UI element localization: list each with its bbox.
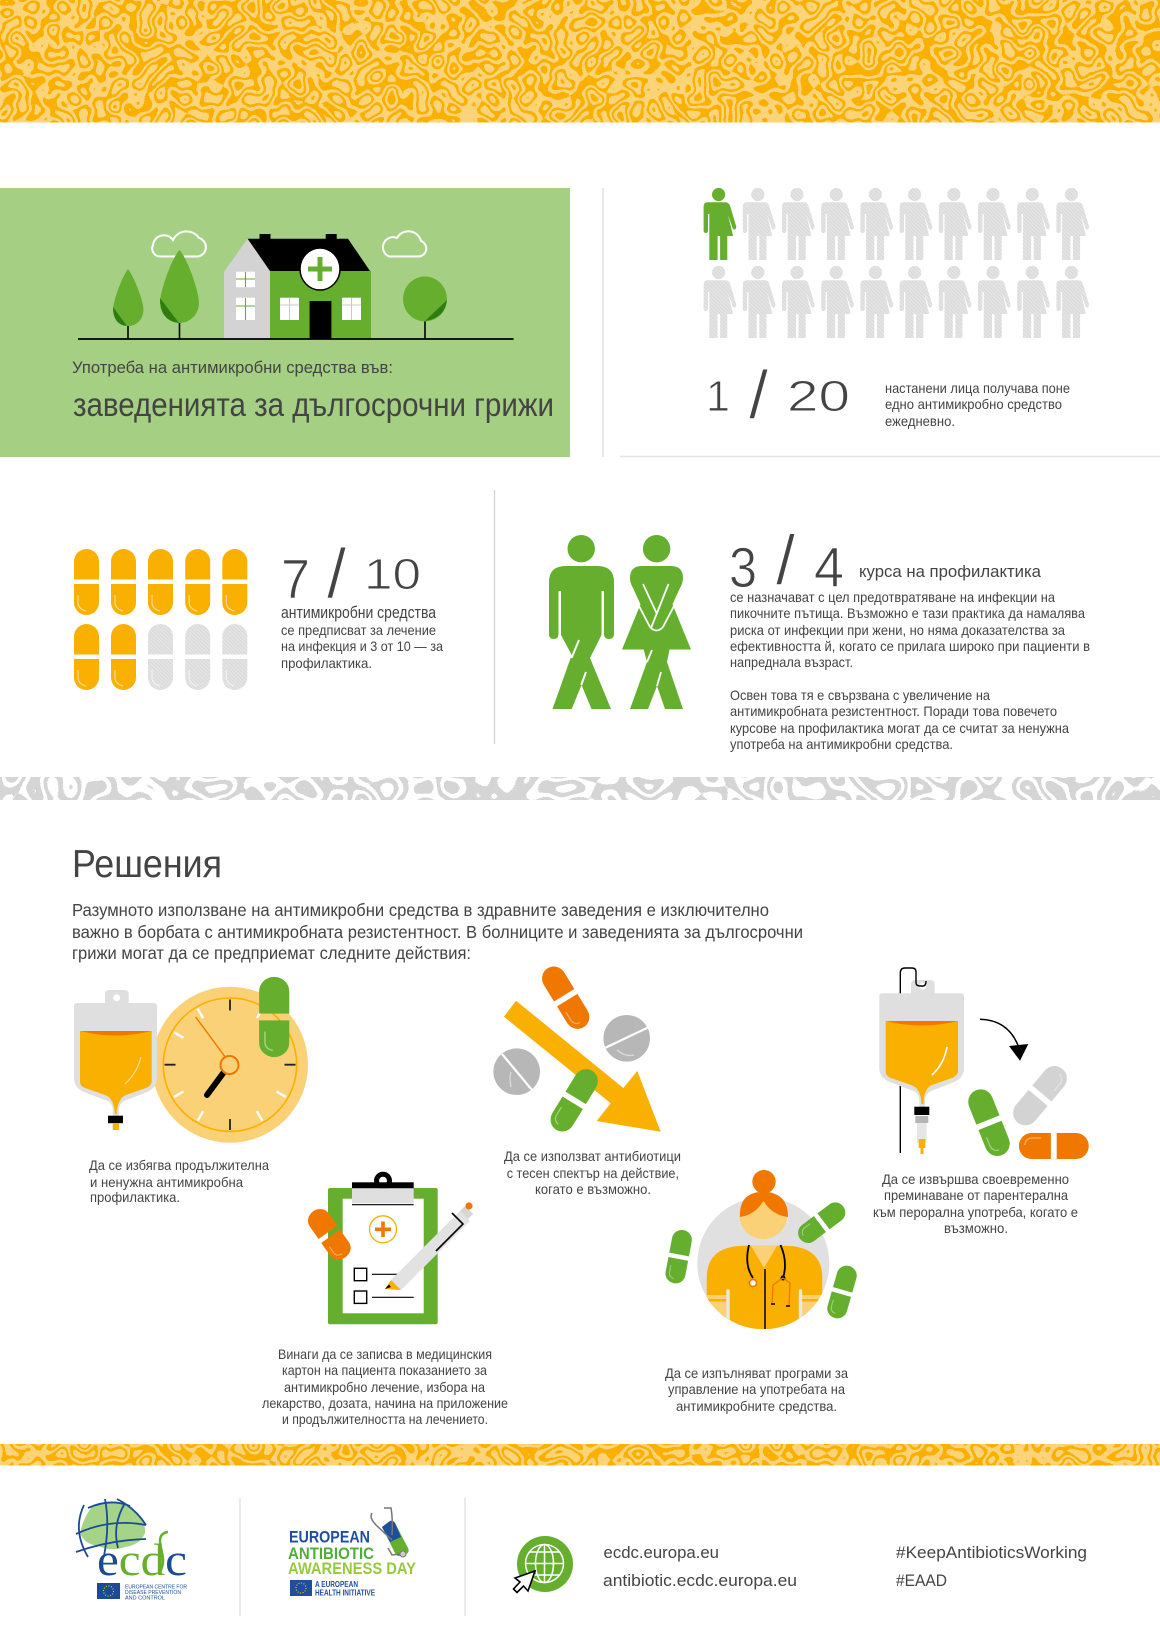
- text: websites: [603, 1543, 797, 1590]
- text: 3 / 4 description: пикочните пътища. Възможно е тази практика да намалява: [730, 606, 1085, 621]
- text: IV to oral switch: към перорална употреба, когато е: [873, 1205, 1078, 1220]
- text: 3 / 4 heading: курса на профилактика: [859, 563, 1042, 581]
- stat: 3 / 4: [729, 521, 844, 600]
- chart: 7 in 10 capsules: [74, 549, 247, 690]
- stat: 7 / 10: 7: [281, 547, 310, 610]
- stat: 3 / 4: 3: [729, 536, 757, 600]
- stat: 1 / 20: 1: [706, 372, 730, 421]
- text: 3 / 4 description: риска от инфекции при жени, но няма доказателства за: [730, 623, 1065, 638]
- stat: 1 / 20: /: [749, 357, 768, 433]
- text: 7 / 10 description: [281, 604, 443, 671]
- text: 3 / 4 description: курсове на профилактика могат да се считат за ненужна: [730, 721, 1069, 736]
- icon: clipboard with pen and capsule: [304, 1172, 473, 1324]
- logo: ECDC: EUROPEAN CENTRE FOR: [125, 1584, 187, 1590]
- logo: European Antibiotic Awareness Day: HEALTH INITIATIVE: [315, 1588, 376, 1598]
- text: 7 / 10 description: антимикробни средства: [281, 604, 437, 622]
- text: always record indication: лекарство, дозата, начина на приложение: [262, 1396, 508, 1411]
- text: IV to oral switch: Да се извършва своевременно: [882, 1172, 1069, 1187]
- text: 3 / 4 description: употреба на антимикробни средства.: [730, 737, 953, 752]
- text: always record indication: и продължителността на лечението.: [282, 1412, 488, 1427]
- subtitle: Употреба на антимикробни средства във:: [72, 358, 393, 377]
- text: 3 / 4 description: се назначават с цел предотвратяване на инфекции на: [730, 590, 1055, 605]
- icon: narrow spectrum arrow with pills: [493, 962, 661, 1136]
- text: 3 / 4 description: Освен това тя е свързвана с увеличение на: [730, 688, 990, 703]
- text: always record indication: картон на пациента показанието за: [282, 1363, 487, 1378]
- text: narrow spectrum: [504, 1149, 681, 1197]
- stat: 7 / 10: /: [327, 534, 347, 612]
- icon: clock with IV bag and capsule: [74, 977, 308, 1143]
- text: stewardship programmes: антимикробните средства.: [676, 1399, 837, 1414]
- text: narrow spectrum: с тесен спектър на действие,: [507, 1166, 679, 1181]
- text: stewardship programmes: Да се изпълняват програми за: [665, 1366, 848, 1381]
- icon: globe with cursor: [514, 1536, 573, 1592]
- text: 7 / 10 description: профилактика.: [281, 656, 372, 671]
- icon: IV bag to oral switch: [879, 968, 1089, 1160]
- logo: ECDC: [76, 1499, 187, 1602]
- text: avoid prolonged prophylaxis: Да се избягва продължителна: [89, 1158, 269, 1173]
- text: 3 / 4 description: [730, 590, 1090, 752]
- stat: 1 / 20: [706, 357, 850, 433]
- logo: European Antibiotic Awareness Day: ANTIBIOTIC: [288, 1544, 374, 1563]
- title: заведенията за дългосрочни грижи: [73, 386, 554, 423]
- text: avoid prolonged prophylaxis: профилактика.: [90, 1190, 180, 1205]
- logo: ECDC: AND CONTROL: [125, 1596, 165, 1602]
- text: stewardship programmes: управление на употребата на: [668, 1382, 845, 1397]
- text: 3 / 4 description: антимикробната резистентност. Поради това повечето: [730, 704, 1057, 719]
- text: stewardship programmes: [665, 1366, 848, 1414]
- stat: 3 / 4: /: [776, 521, 796, 599]
- text: hashtags: #KeepAntibioticsWorking: [896, 1543, 1087, 1562]
- text: 1 / 20 description: едно антимикробно средство: [885, 397, 1062, 412]
- logo: European Antibiotic Awareness Day: A EUROPEAN: [315, 1580, 358, 1589]
- text: solutions intro: важно в борбата с антимикробната резистентност. В болниците и заведенията за дългосрочни: [72, 922, 803, 942]
- text: always record indication: антимикробно лечение, избора на: [284, 1380, 485, 1395]
- text: hashtags: #EAAD: [896, 1571, 947, 1590]
- logo: European Antibiotic Awareness Day: AWARENESS DAY: [288, 1559, 417, 1578]
- text: websites: antibiotic.ecdc.europa.eu: [603, 1571, 797, 1590]
- icon: man and woman figures: [549, 535, 691, 709]
- text: websites: ecdc.europa.eu: [604, 1543, 719, 1562]
- yellow patterned band: [0, 1444, 1160, 1466]
- text: IV to oral switch: [873, 1172, 1078, 1236]
- grey patterned band: [0, 777, 1160, 800]
- text: 1 / 20 description: [885, 381, 1070, 429]
- stat: 3 / 4: 4: [814, 536, 844, 600]
- text: always record indication: [262, 1347, 508, 1427]
- text: solutions intro: грижи могат да се предприемат следните действия:: [72, 943, 471, 963]
- stat: 7 / 10: 10: [364, 550, 421, 599]
- panel: title panel: [0, 188, 570, 457]
- logo: ECDC: ecdc: [97, 1534, 187, 1585]
- text: 7 / 10 description: се предписват за лечение: [281, 623, 436, 638]
- top patterned band: [0, 0, 1160, 122]
- stat: 1 / 20: 20: [787, 372, 850, 421]
- chart: 1 in 20 residents pictogram: [704, 188, 1089, 338]
- logo: ECDC: DISEASE PREVENTION: [125, 1590, 181, 1596]
- logo: European Antibiotic Awareness Day: [288, 1508, 417, 1598]
- text: 7 / 10 description: на инфекция и 3 от 10 — за: [281, 639, 443, 654]
- text: 1 / 20 description: настанени лица получава поне: [885, 381, 1070, 396]
- stat: 7 / 10: [281, 534, 421, 612]
- icon: doctor with pills: [664, 1170, 859, 1340]
- text: solutions intro: Разумното използване на антимикробни средства в здравните заведения е изключително: [72, 900, 769, 920]
- text: narrow spectrum: Да се използват антибиотици: [504, 1149, 681, 1164]
- heading: solutions: Решения: [72, 843, 222, 886]
- text: avoid prolonged prophylaxis: [89, 1158, 269, 1205]
- text: solutions intro: [72, 900, 803, 963]
- text: 3 / 4 description: ефективността й, когато се прилага широко при пациенти в: [730, 639, 1090, 654]
- text: avoid prolonged prophylaxis: и ненужна антимикробна: [90, 1175, 243, 1190]
- text: hashtags: [896, 1543, 1087, 1590]
- text: 3 / 4 description: напреднала възраст.: [730, 655, 853, 670]
- text: narrow spectrum: когато е възможно.: [535, 1182, 651, 1197]
- icon: care home illustration: [78, 231, 514, 339]
- logo: European Antibiotic Awareness Day: EUROPEAN: [289, 1528, 370, 1547]
- text: IV to oral switch: възможно.: [944, 1221, 1008, 1236]
- text: IV to oral switch: преминаване от парентерална: [884, 1188, 1068, 1203]
- text: always record indication: Винаги да се записва в медицинския: [278, 1347, 492, 1362]
- text: 1 / 20 description: ежедневно.: [885, 414, 955, 429]
